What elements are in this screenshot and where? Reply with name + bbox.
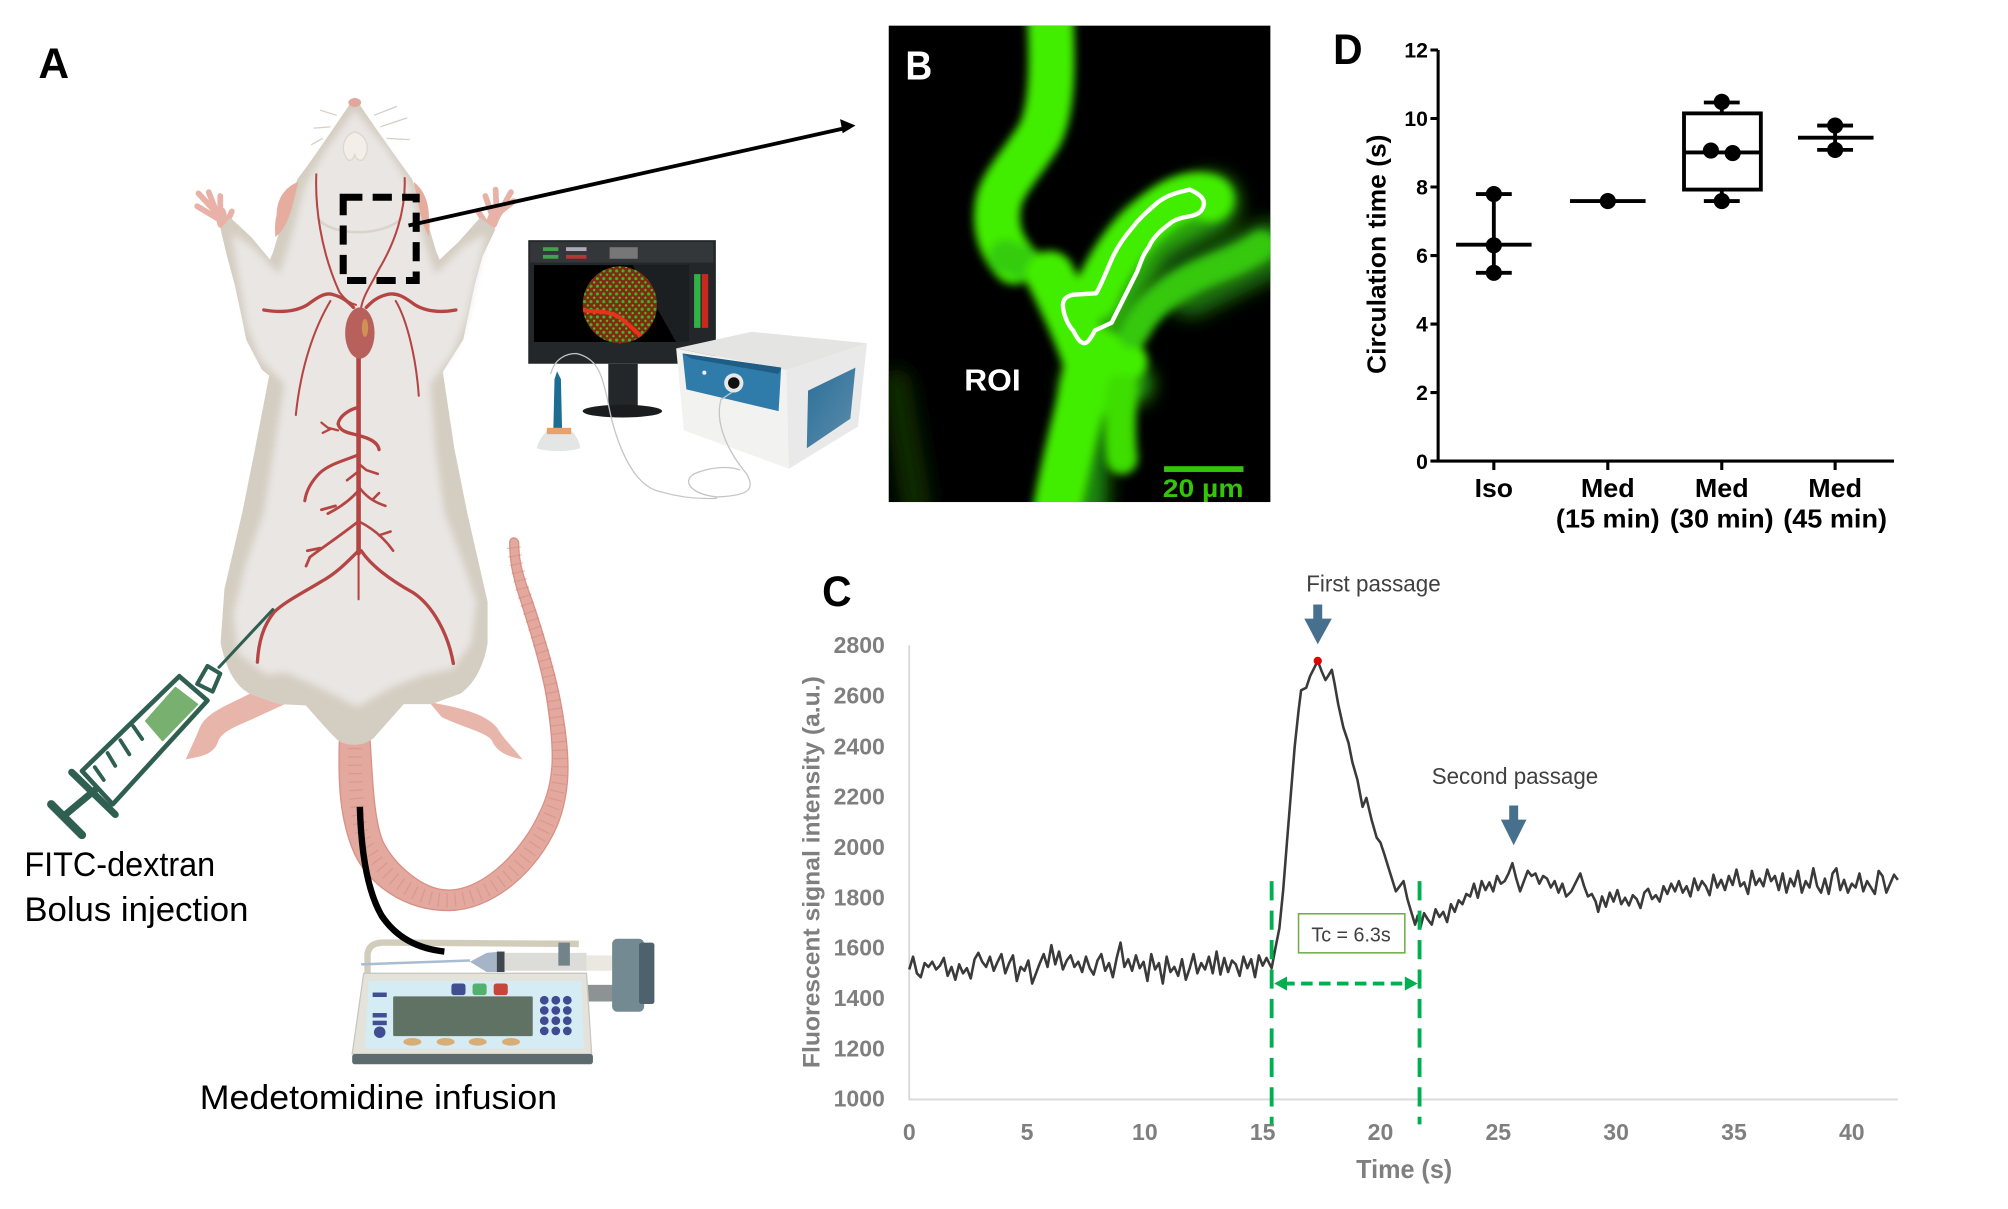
label: FITC-dextran bolus injection <box>24 846 248 929</box>
monitor stand <box>583 364 662 418</box>
C x tick labels: 15 <box>1250 1119 1276 1145</box>
pump syringe <box>361 943 615 972</box>
C y tick labels: 2200 <box>834 783 885 809</box>
label: FITC-dextran bolus injection: FITC-dextran <box>24 846 215 884</box>
panel B: fluorescence image <box>889 13 1270 506</box>
rat whiskers <box>311 106 410 145</box>
C x tick labels <box>903 1119 1865 1145</box>
Med 15 min data <box>1570 193 1646 209</box>
panel letter C: C <box>822 568 852 615</box>
C y tick labels: 1000 <box>834 1086 885 1112</box>
C y tick labels: 2000 <box>834 834 885 860</box>
C x tick labels: 25 <box>1485 1119 1511 1145</box>
C x tick labels: 0 <box>903 1119 916 1145</box>
first passage label: First passage <box>1306 571 1441 597</box>
syringe pump <box>352 939 654 1064</box>
D x category labels: Med <box>1695 475 1749 503</box>
C y tick labels: 1600 <box>834 934 885 960</box>
D x category labels: Med <box>1581 475 1635 503</box>
C axes <box>909 645 1898 1099</box>
Tc callout <box>1299 914 1405 953</box>
rat body silhouette <box>222 99 494 744</box>
C y tick labels: 2400 <box>834 733 885 759</box>
D x category labels: (45 min) <box>1783 506 1887 534</box>
C y tick labels: 2800 <box>834 632 885 658</box>
monitor <box>528 240 716 364</box>
first passage arrow <box>1304 604 1332 644</box>
rat jaw line <box>318 218 402 232</box>
pump buttons <box>373 984 572 1046</box>
syringe <box>51 610 273 835</box>
arrow to panel B <box>409 119 855 225</box>
rat ears <box>275 182 430 237</box>
D y tick labels <box>1404 40 1428 474</box>
D axes and ticks <box>1430 50 1894 470</box>
scale bar <box>1163 466 1243 503</box>
panel letter A: A <box>38 40 69 87</box>
rat tail <box>339 538 568 911</box>
C x tick labels: 5 <box>1021 1119 1034 1145</box>
D y tick labels: 4 <box>1416 314 1428 337</box>
green dashed time markers <box>1272 881 1420 1124</box>
imaging system: monitor, device and probe <box>528 240 867 499</box>
D x category labels: Iso <box>1475 475 1513 503</box>
C y axis title: Fluorescent signal intensity (a.u.) <box>799 676 826 1068</box>
D x category labels: (30 min) <box>1670 506 1774 534</box>
signal trace <box>909 661 1898 984</box>
D y tick labels: 2 <box>1416 382 1428 405</box>
C y tick labels: 2600 <box>834 683 885 709</box>
rat heart <box>345 307 375 359</box>
imaging device <box>676 332 867 469</box>
rat snout <box>343 132 367 160</box>
C y tick labels: 1800 <box>834 884 885 910</box>
Med 30 min data <box>1684 94 1761 209</box>
pump panel <box>365 981 584 1049</box>
C y tick labels <box>834 632 885 1112</box>
pump base <box>352 1054 593 1064</box>
panel C: fluorescent trace chart <box>799 568 1898 1184</box>
dashed imaging window <box>343 197 416 281</box>
rat feet <box>186 692 522 759</box>
rat nose <box>348 98 361 107</box>
peak marker <box>1314 657 1322 665</box>
D y tick labels: 8 <box>1416 177 1428 200</box>
transit time double arrow <box>1274 977 1418 991</box>
panel letter D: D <box>1333 26 1363 73</box>
fiber cables <box>551 354 750 499</box>
rat body inner shading <box>232 110 487 707</box>
second passage arrow <box>1501 806 1526 845</box>
rat arteries <box>257 174 456 663</box>
D y axis title: Circulation time (s) <box>1364 135 1392 374</box>
pump drive unit <box>587 939 654 1012</box>
D y tick labels: 6 <box>1416 245 1428 268</box>
second passage label: Second passage <box>1432 763 1598 789</box>
panel A: rat injection setup <box>24 40 867 1117</box>
ROI outline <box>1063 190 1204 343</box>
C x tick labels: 40 <box>1839 1119 1865 1145</box>
D y tick labels: 10 <box>1404 108 1428 131</box>
label: medetomidine infusion: Medetomidine infusion <box>200 1079 557 1117</box>
pump arch <box>368 943 579 973</box>
Tc callout: Tc = 6.3s <box>1311 923 1391 946</box>
C x tick labels: 35 <box>1721 1119 1747 1145</box>
fiber probe <box>537 371 580 451</box>
D y tick labels: 12 <box>1404 40 1428 63</box>
scale bar: 20 µm <box>1163 475 1243 503</box>
Med 45 min data <box>1798 117 1874 158</box>
green vessels <box>896 13 1268 506</box>
Iso group data <box>1456 186 1532 281</box>
rat hands <box>197 190 514 227</box>
pump screen <box>393 996 533 1036</box>
label: FITC-dextran bolus injection: Bolus injection <box>24 891 248 929</box>
ROI label: ROI <box>964 363 1021 398</box>
panel letter B: B <box>905 42 932 88</box>
D x category labels <box>1475 475 1887 534</box>
pump body <box>352 973 592 1054</box>
black image background <box>889 26 1270 502</box>
D x category labels: Med <box>1808 475 1862 503</box>
C x axis title: Time (s) <box>1356 1156 1452 1184</box>
C x tick labels: 10 <box>1132 1119 1158 1145</box>
C y tick labels: 1200 <box>834 1036 885 1062</box>
infusion tube <box>360 807 444 952</box>
D y tick labels: 0 <box>1416 451 1428 474</box>
C x tick labels: 20 <box>1368 1119 1393 1145</box>
C x tick labels: 30 <box>1603 1119 1629 1145</box>
panel D: circulation time plot <box>1333 26 1894 534</box>
C y tick labels: 1400 <box>834 985 885 1011</box>
D x category labels: (15 min) <box>1556 506 1660 534</box>
